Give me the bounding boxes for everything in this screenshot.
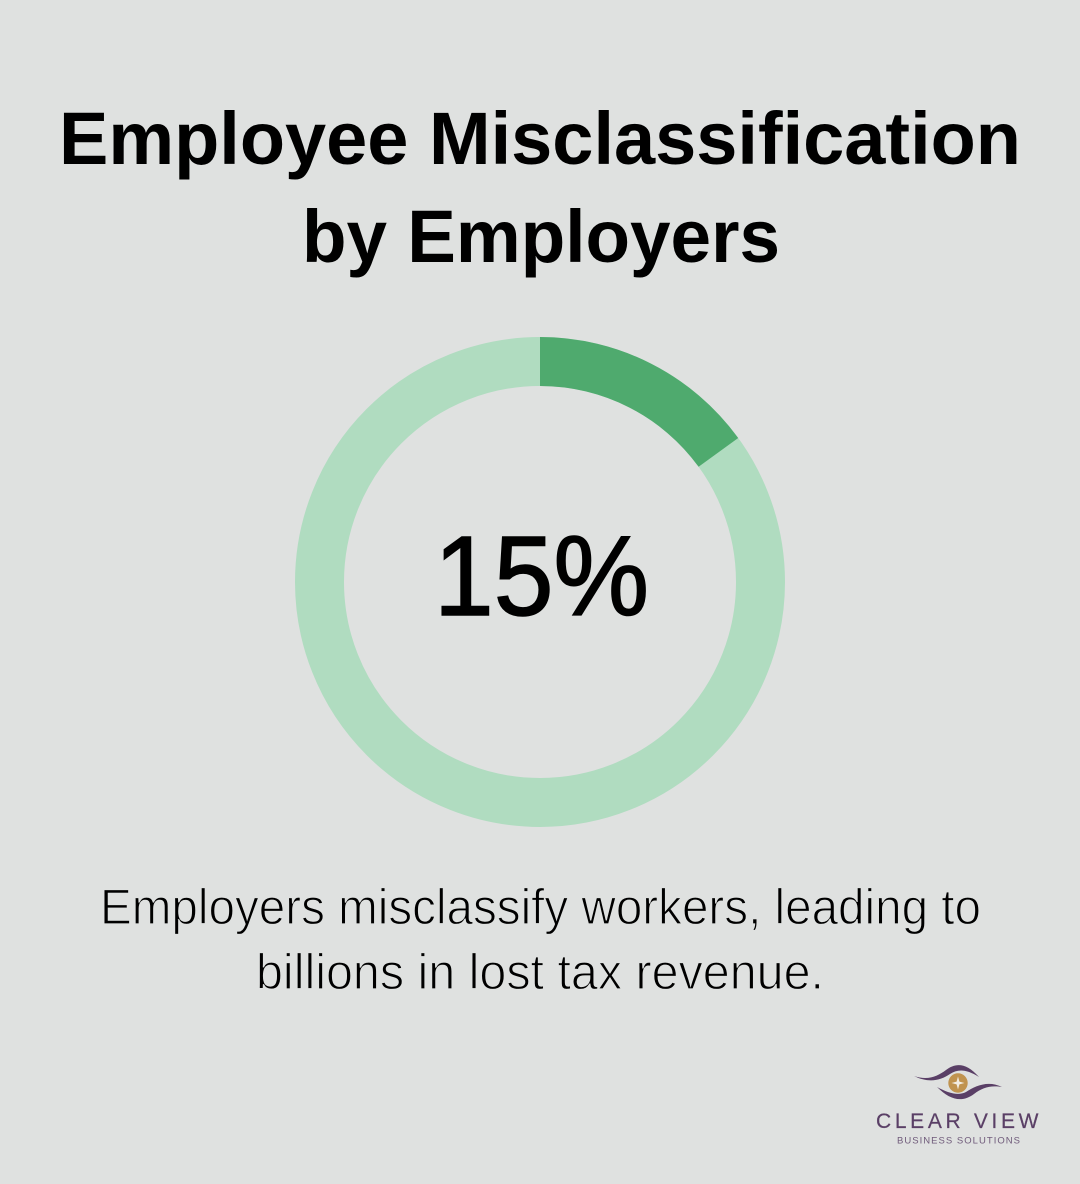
description text: Employers misclassify workers, leading to (100, 879, 981, 935)
logo tagline: BUSINESS SOLUTIONS (897, 1136, 1020, 1146)
logo: Clear View Business Solutions (876, 1065, 1040, 1146)
donut value: 15% (434, 513, 649, 639)
description text: billions in lost tax revenue. (256, 944, 824, 1000)
donut chart: 15% (320, 337, 760, 802)
title: by Employers (302, 195, 780, 278)
logo wordmark: CLEAR VIEW (876, 1110, 1040, 1133)
description text (100, 879, 981, 1000)
title (59, 97, 1021, 278)
title: Employee Misclassification (59, 97, 1021, 180)
icon: eye with star (914, 1065, 1002, 1099)
